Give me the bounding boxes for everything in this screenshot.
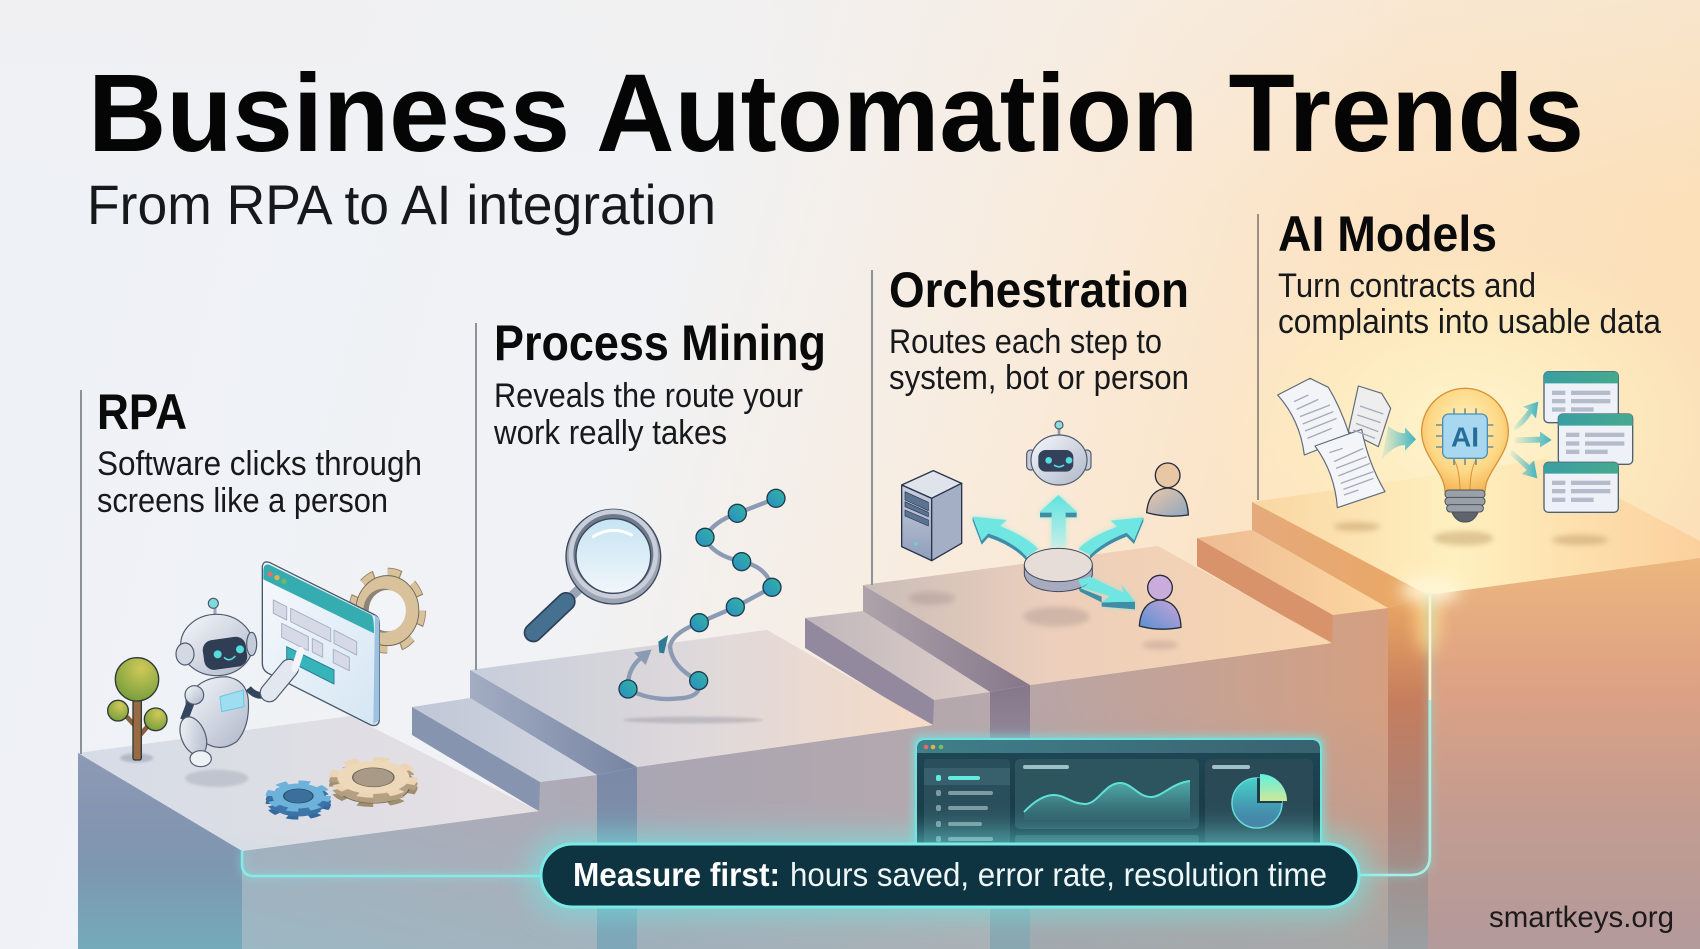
icon: robot head [1027, 421, 1091, 485]
connector line [242, 595, 1430, 876]
text: AI Models description: Turn contracts and [1278, 267, 1536, 305]
platform 1: RPA step [78, 716, 597, 949]
text: RPA description [97, 445, 422, 520]
panel: RPA [81, 384, 422, 754]
text: Process Mining description: work really takes [493, 414, 727, 452]
icon: robot [175, 598, 301, 787]
text: Orchestration description: Routes each step to [889, 323, 1162, 361]
icon: documents [1278, 378, 1391, 508]
platform 4: AI Models step [1197, 459, 1700, 949]
illustration: process route [533, 489, 785, 723]
shadows [1333, 522, 1608, 546]
callout: measure first: Measure first: [573, 856, 780, 893]
title: Business Automation Trends [88, 52, 1584, 175]
illustration: orchestration hub [902, 421, 1188, 649]
shadows [908, 592, 1178, 649]
text: Process Mining description [493, 377, 803, 452]
shadow [623, 717, 763, 723]
heading: AI Models: AI Models [1278, 206, 1497, 262]
icon: data table bottom [1544, 462, 1618, 512]
arrows: routing [973, 495, 1143, 609]
dashboard [912, 735, 1325, 855]
heading: Orchestration: Orchestration [889, 262, 1189, 318]
subtitle: From RPA to AI integration [87, 173, 716, 236]
text: Orchestration description: system, bot or person [889, 359, 1189, 397]
icon: AI chip: AI [1451, 422, 1479, 453]
text: RPA description: screens like a person [97, 482, 388, 520]
icon: data table top [1544, 372, 1618, 423]
icon: person bottom [1139, 575, 1181, 629]
panel: AI Models [1258, 206, 1661, 500]
illustration: AI extraction [1278, 372, 1633, 546]
dashboard sidebar [924, 759, 1010, 849]
arrows: bulb to tables [1510, 402, 1552, 478]
text: AI Models description [1278, 267, 1661, 341]
icon: app window [262, 562, 379, 726]
text: RPA description: Software clicks through [97, 445, 422, 483]
dashboard line chart [1015, 759, 1199, 849]
icon: beige floor gear [334, 759, 413, 805]
panel: Orchestration [872, 262, 1189, 585]
illustration: RPA scene [108, 562, 421, 818]
callout: measure first: hours saved, error rate, resolution time [790, 856, 1327, 893]
icon: blue floor gear [270, 782, 327, 818]
icon: tree [108, 658, 167, 763]
floor glow [78, 577, 1460, 949]
credit: smartkeys.org [1489, 901, 1674, 934]
icon: hub [1024, 548, 1095, 592]
icon: upright beige gear [354, 573, 421, 648]
platform 2: Process Mining step [412, 630, 990, 949]
chart: winding route [619, 489, 785, 699]
icon: magnifying glass [533, 509, 661, 633]
icon: light bulb [1422, 388, 1508, 522]
callout: measure first [530, 834, 1370, 917]
icon: data table middle [1558, 414, 1633, 464]
text: Orchestration description [889, 323, 1189, 397]
platform 3: Orchestration step [805, 546, 1388, 949]
icon: person top [1147, 463, 1188, 516]
heading: Process Mining: Process Mining [494, 315, 826, 371]
dashboard pie chart [1205, 759, 1313, 847]
arrow: documents into bulb [1382, 426, 1416, 460]
text: AI Models description: complaints into usable data [1278, 303, 1661, 341]
panel: Process Mining [476, 315, 826, 670]
icon: server [902, 471, 962, 561]
heading: RPA: RPA [97, 384, 187, 440]
text: Process Mining description: Reveals the route your [494, 377, 803, 415]
